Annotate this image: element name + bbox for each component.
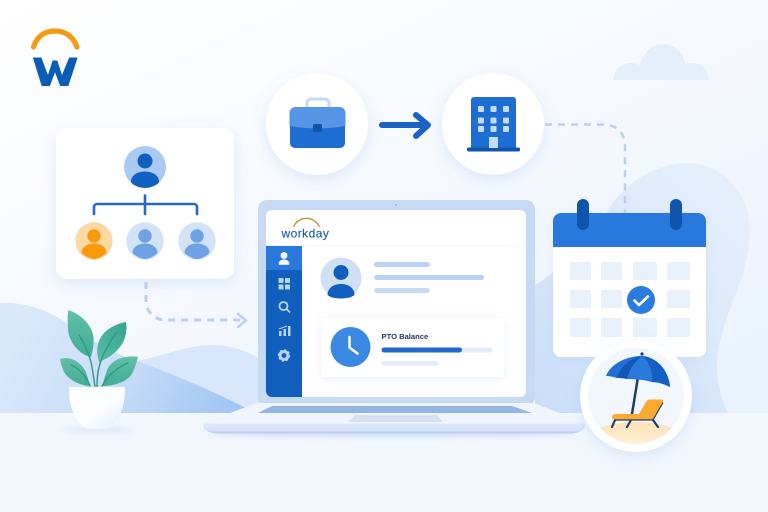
- pot: [69, 387, 125, 429]
- profile avatar: [320, 258, 362, 298]
- laptop: [203, 200, 585, 436]
- PTO label: PTO Balance: [382, 332, 428, 341]
- icon: user: [279, 252, 289, 265]
- floor: [0, 413, 768, 512]
- calendar header: [553, 213, 706, 247]
- icon: gear: [278, 350, 290, 361]
- workday wordmark: [280, 218, 329, 241]
- sidebar: [266, 246, 302, 397]
- laptop lid: [258, 200, 535, 406]
- background blob right: [535, 163, 750, 413]
- avatar: orange report: [75, 222, 113, 260]
- laptop base: [203, 403, 585, 434]
- icon: grid: [278, 278, 290, 290]
- icon circle: briefcase: [266, 73, 368, 175]
- calendar day cells: [570, 262, 690, 337]
- plant: [60, 310, 138, 432]
- stems and veins: [71, 333, 128, 387]
- icon: search: [280, 302, 290, 312]
- workday wordmark: workday: [280, 227, 329, 241]
- Workday logo mark: [34, 31, 77, 86]
- icon circle: office building: [442, 73, 544, 175]
- org connector lines: [94, 196, 197, 214]
- hills left: [0, 303, 262, 413]
- beach umbrella: [606, 352, 670, 414]
- vacation badge: [580, 340, 692, 452]
- laptop shadow: [209, 432, 579, 436]
- avatar: manager: [124, 146, 166, 190]
- PTO balance card: [321, 318, 504, 377]
- dashed connector: building to calendar: [545, 124, 625, 213]
- calendar rings: [577, 199, 682, 230]
- calendar: [553, 199, 706, 357]
- check badge: [627, 286, 655, 314]
- icon: clock: [330, 327, 370, 367]
- sand: [600, 422, 672, 444]
- arrow: briefcase to building: [382, 115, 428, 136]
- sun lounger: [612, 400, 663, 427]
- pot shadow: [61, 428, 133, 432]
- dashed arrow: org chart to laptop: [146, 282, 246, 327]
- icon: chart: [279, 326, 290, 336]
- leaves: [60, 310, 138, 387]
- avatar: blue report: [126, 222, 164, 260]
- profile text lines: [374, 262, 484, 293]
- panel: org chart: [56, 128, 234, 279]
- avatar: blue report: [178, 222, 216, 260]
- PTO progress bar: [382, 348, 492, 352]
- laptop screen: [266, 210, 526, 397]
- cloud: [613, 44, 709, 80]
